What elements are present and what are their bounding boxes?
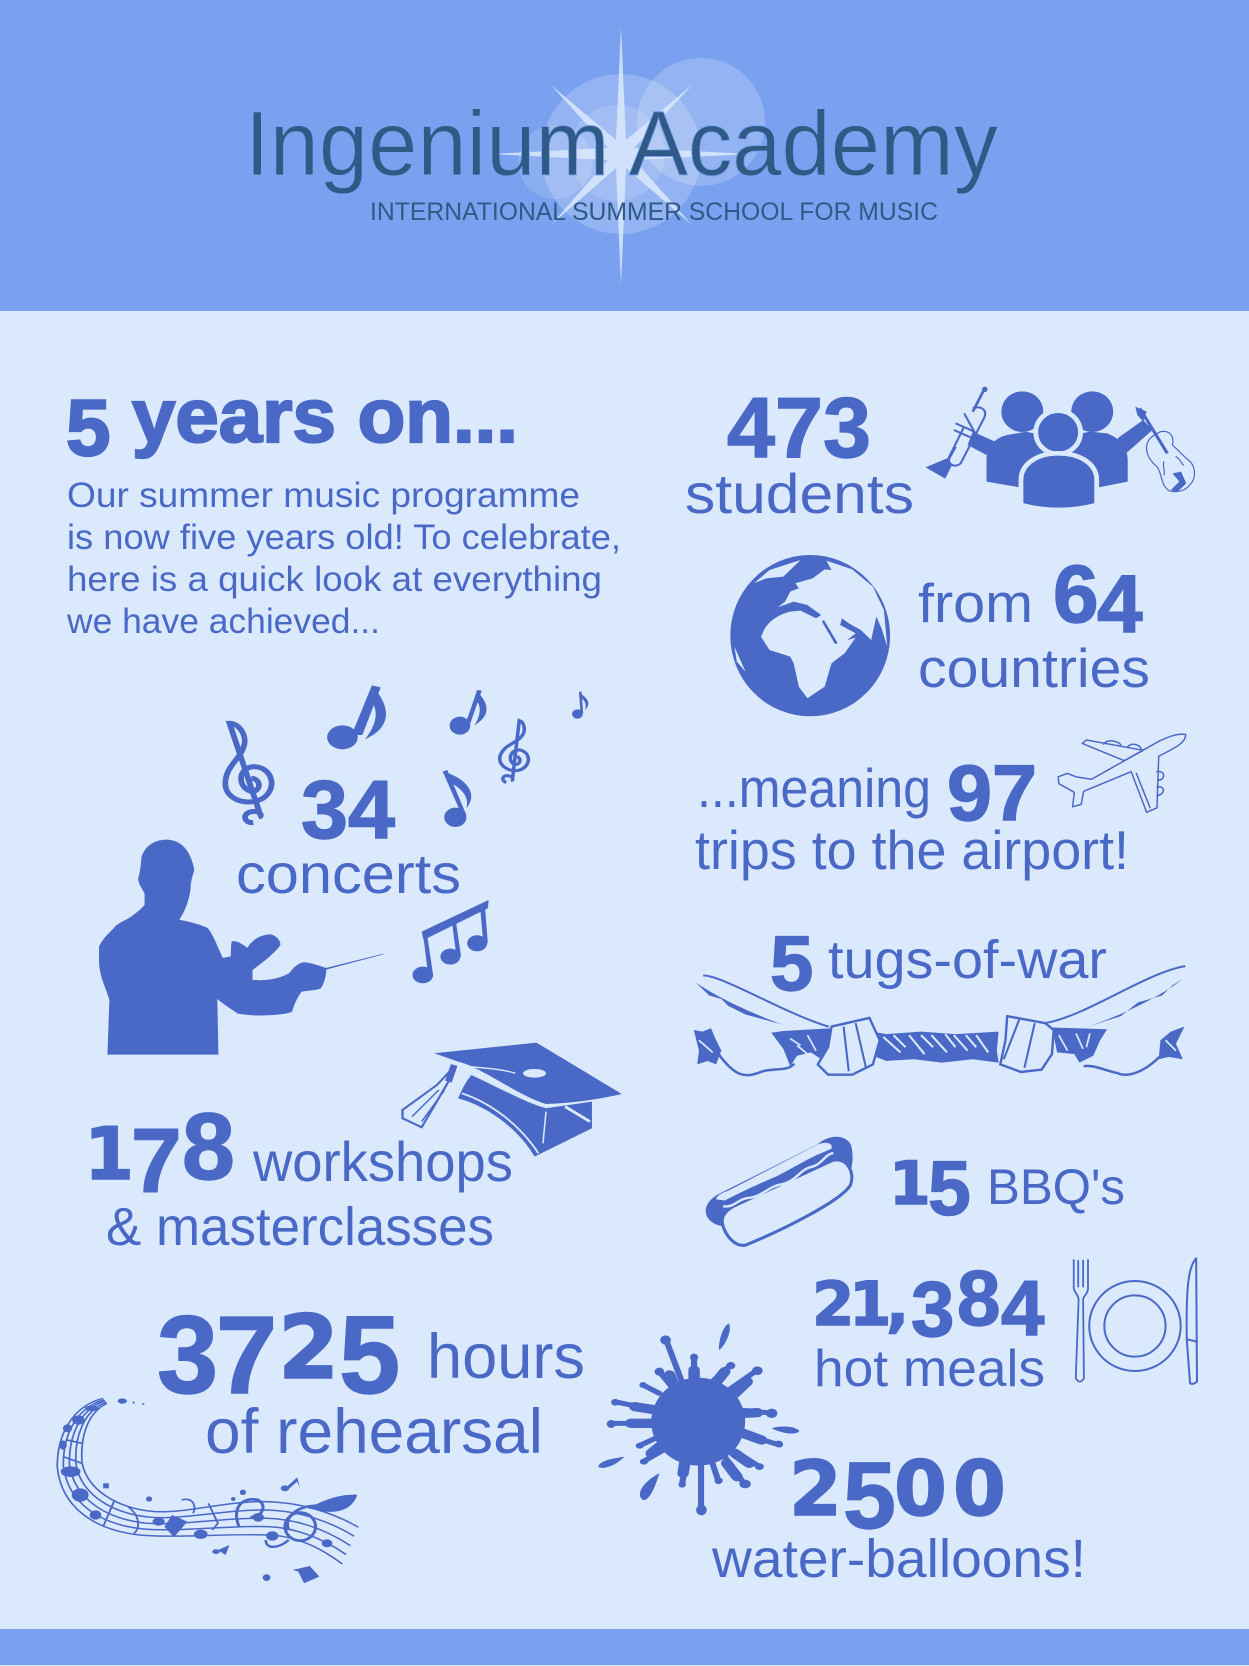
title: Ingenium Academy	[245, 93, 998, 195]
stat: 3725 hours of rehearsal: hours	[427, 1322, 585, 1392]
icon: hot dog	[706, 1137, 853, 1245]
stat: 3725 hours of rehearsal: 7	[216, 1294, 277, 1417]
side figures	[968, 391, 1153, 487]
stat: 5 tugs-of-war: tugs-of-war	[828, 930, 1107, 990]
stat: 5 tugs-of-war	[770, 919, 1107, 1007]
stat: 3725 hours of rehearsal: 5	[339, 1294, 400, 1417]
stat: 15 BBQ's: 5	[928, 1146, 971, 1232]
icon: airplane	[1058, 734, 1186, 812]
icon: curved music staff	[57, 1398, 358, 1583]
stat: 2500 water-balloons: 0	[953, 1444, 1006, 1533]
icon: floating notes and clefs	[225, 685, 588, 983]
stat: meaning 97 trips to the airport: ...meaning	[697, 757, 931, 819]
stat: 2500 water-balloons: 0	[894, 1444, 947, 1533]
stat: 2500 water-balloons	[711, 1443, 1086, 1589]
stat: 473 students: 473	[727, 381, 871, 476]
stat: 5 tugs-of-war: 5	[770, 919, 813, 1007]
stat: 2500 water-balloons: water-balloons!	[711, 1529, 1086, 1589]
stat: 3725 hours of rehearsal: 2	[278, 1296, 339, 1399]
icon: graduation cap	[403, 1043, 622, 1157]
subtitle: INTERNATIONAL SUMMER SCHOOL FOR MUSIC	[370, 198, 938, 226]
stat: 178 workshops and masterclasses: 1	[84, 1112, 134, 1196]
front figure	[1021, 411, 1097, 510]
stat: from 64 countries: countries	[918, 637, 1150, 699]
stat: 34 concerts	[236, 763, 461, 905]
footer band	[0, 1629, 1249, 1665]
icon: tug of war rope and hands	[694, 966, 1185, 1075]
stat: 21,384 hot meals	[812, 1254, 1045, 1398]
stat: meaning 97 trips to the airport: trips to the airport!	[695, 819, 1129, 881]
trumpet	[926, 387, 988, 479]
heading: 5 years on: 5	[66, 383, 110, 472]
intro paragraph	[66, 476, 621, 641]
stat: 15 BBQ's: BBQ's	[987, 1159, 1125, 1215]
stat: 2500 water-balloons: 2	[789, 1444, 842, 1533]
icon: students with instruments	[926, 387, 1195, 510]
icon: water splat	[598, 1323, 799, 1515]
stat: 3725 hours of rehearsal: 3	[157, 1294, 218, 1417]
violin	[1135, 407, 1195, 492]
stat: 21,384 hot meals: 3	[911, 1265, 954, 1353]
stat: 15 BBQ's: 1	[889, 1149, 931, 1219]
stat: 3725 hours of rehearsal	[157, 1294, 585, 1467]
heading: 5 years on: years on...	[132, 374, 518, 459]
stat: 178 workshops and masterclasses: 7	[131, 1111, 182, 1212]
intro paragraph: is now five years old! To celebrate,	[67, 518, 621, 557]
stat: 34 concerts: 34	[301, 763, 395, 856]
icon: fork, plate and knife	[1074, 1258, 1197, 1384]
logo: star and circles	[490, 27, 765, 285]
stat: 21,384 hot meals: ,	[886, 1269, 909, 1340]
icon: conductor silhouette	[99, 840, 383, 1054]
stat: meaning 97 trips to the airport	[695, 748, 1129, 881]
stat: from 64 countries: 6	[1053, 549, 1099, 640]
intro paragraph: we have achieved...	[66, 602, 380, 641]
stat: 178 workshops and masterclasses: & masterclasses	[106, 1197, 494, 1257]
stat: 15 BBQ's	[889, 1146, 1125, 1232]
stat: 473 students	[685, 381, 914, 525]
stat: 34 concerts: concerts	[236, 842, 461, 905]
stat: 473 students: students	[685, 462, 914, 525]
stat: 2500 water-balloons: 5	[843, 1443, 896, 1549]
stat: 21,384 hot meals: 1	[849, 1269, 891, 1340]
stat: 3725 hours of rehearsal: of rehearsal	[205, 1397, 543, 1467]
stat: 178 workshops and masterclasses: workshops	[252, 1130, 513, 1193]
stat: 21,384 hot meals: 2	[812, 1269, 854, 1340]
stat: 21,384 hot meals: 4	[1001, 1264, 1044, 1352]
stat: 178 workshops and masterclasses	[84, 1094, 513, 1257]
header band	[0, 0, 1249, 311]
stat: meaning 97 trips to the airport: 97	[947, 748, 1037, 837]
intro paragraph: Our summer music programme	[67, 476, 580, 515]
intro paragraph: here is a quick look at everything	[67, 560, 602, 599]
stat: from 64 countries	[918, 549, 1150, 699]
stat: 21,384 hot meals: 8	[957, 1254, 1000, 1342]
icon: globe	[730, 555, 890, 716]
stat: 178 workshops and masterclasses: 8	[182, 1094, 235, 1200]
stat: from 64 countries: from	[918, 572, 1033, 634]
stat: from 64 countries: 4	[1097, 559, 1143, 650]
stat: 21,384 hot meals: hot meals	[814, 1340, 1045, 1398]
